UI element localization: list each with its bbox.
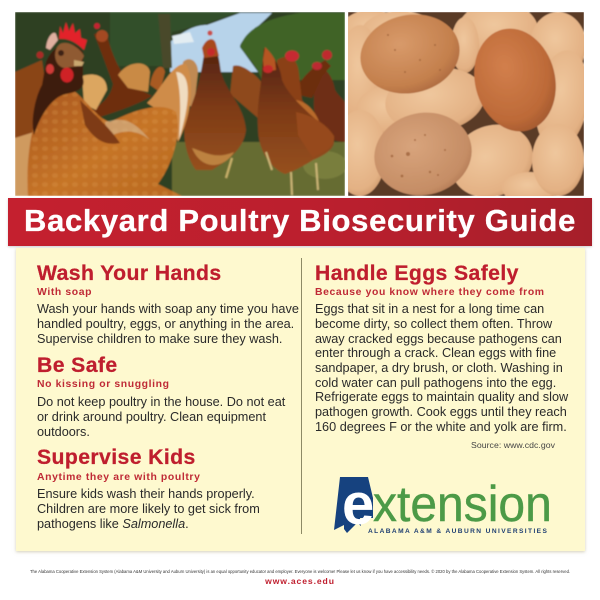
body text: Do not keep poultry in the house. Do not eat — [37, 395, 285, 409]
body text: pathogens like Salmonella. — [37, 517, 189, 531]
heading: Wash Your Hands — [37, 262, 222, 285]
body text — [37, 302, 299, 346]
left canopy — [110, 12, 240, 66]
body text: cold water can pull pathogens into the egg. — [315, 376, 556, 390]
left background hens — [15, 60, 48, 140]
big hen tail — [147, 64, 191, 142]
body text: Wash your hands with soap any time you have — [37, 302, 299, 316]
section: be safe — [37, 354, 286, 439]
body text — [315, 302, 568, 434]
subheading: Because you know where they come from — [315, 287, 545, 298]
body text: Children are more likely to get sick from — [37, 502, 260, 516]
body text: become dirty, so collect them often. Throw — [315, 317, 552, 331]
ground — [172, 142, 345, 196]
icon: Alabama state shape — [334, 477, 373, 533]
subheading: Anytime they are with poultry — [37, 472, 200, 483]
middle hen — [184, 43, 246, 170]
front right hen — [258, 48, 334, 174]
subheading: No kissing or snuggling — [37, 379, 170, 390]
big hen neck and head — [33, 44, 84, 135]
body text: Refrigerate eggs to maintain quality and slow — [315, 390, 568, 404]
body text — [37, 487, 260, 531]
title banner — [8, 198, 592, 246]
sky — [170, 13, 272, 72]
body text: sandpaper, a dry brush, or cloth. Washing in — [315, 361, 563, 375]
logo tagline: ALABAMA A&M & AUBURN UNIVERSITIES — [368, 528, 548, 535]
photo: brown eggs — [348, 12, 584, 196]
body text: Eggs that sit in a nest for a long time can — [315, 302, 544, 316]
body text — [37, 395, 286, 439]
section: handle eggs safely — [315, 262, 568, 434]
subheading: With soap — [37, 287, 92, 298]
body text: Ensure kids wash their hands properly. — [37, 487, 255, 501]
hen behind right hen — [277, 57, 322, 136]
body text: outdoors. — [37, 425, 90, 439]
logo letter e: e — [342, 472, 374, 537]
icon: comb — [59, 22, 87, 50]
far right hen — [312, 67, 345, 142]
body text: Supervise children to make sure they wash. — [37, 332, 282, 346]
background hens rear — [230, 65, 264, 118]
body text: or drink around poultry. Clean equipment — [37, 410, 266, 424]
section: supervise kids — [37, 446, 260, 531]
body text: away cracked eggs because pathogens can — [315, 332, 562, 346]
panel: guide content — [16, 248, 585, 551]
source note: Source: www.cdc.gov — [471, 440, 555, 450]
body text: enter through a crack. Clean eggs with fine — [315, 346, 556, 360]
right tree — [240, 13, 345, 80]
title: Backyard Poultry Biosecurity Guide — [24, 203, 576, 238]
footer disclaimer: The Alabama Cooperative Extension System (Alabama A&M University and Auburn University) is an equal opportunity educator and employer. Everyone is welcome! Please let us know if you have accessibility needs. © 2020 by the Alabama Cooperative Extension System. All rights reserved. — [30, 568, 570, 574]
body text: pathogen growth. Cook eggs until they reach — [315, 405, 567, 419]
heading: Be Safe — [37, 354, 118, 377]
body text: handled poultry, eggs, or anything in the area. — [37, 317, 294, 331]
divider — [301, 258, 302, 534]
second hen — [78, 32, 152, 120]
photo: hens in a field — [15, 12, 345, 196]
logo: Alabama Extension — [334, 472, 552, 537]
footer url: www.aces.edu — [265, 576, 335, 586]
body text: 160 degrees F or the white and yolk are firm. — [315, 420, 567, 434]
heading: Supervise Kids — [37, 446, 196, 469]
section: wash your hands — [36, 262, 299, 346]
logo wordmark: xtension — [373, 476, 552, 532]
heading: Handle Eggs Safely — [315, 262, 519, 285]
big hen body — [27, 88, 182, 196]
